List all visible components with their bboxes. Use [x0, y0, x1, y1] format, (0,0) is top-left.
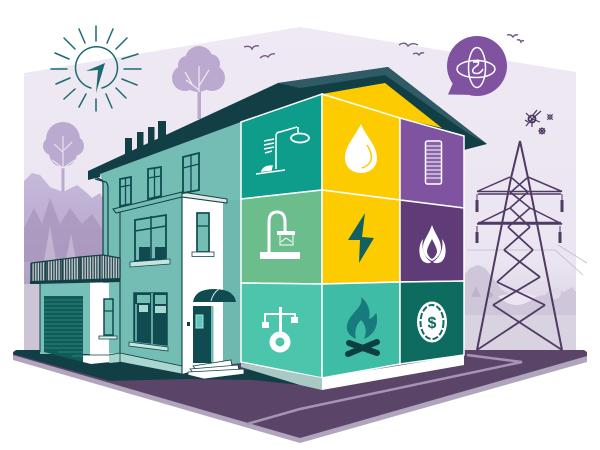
icon: atom speech bubble — [447, 36, 507, 96]
plinth right — [322, 355, 464, 390]
icon: campfire — [347, 297, 377, 354]
icon: gas flame — [419, 225, 446, 263]
icon: sparks — [525, 110, 553, 135]
icon: shower — [256, 127, 309, 174]
distant hills and trees — [465, 265, 576, 352]
roof — [88, 67, 487, 180]
ground surface — [13, 350, 587, 438]
bay window upper — [192, 213, 214, 256]
forest silhouette — [24, 173, 104, 350]
facade plinth — [120, 353, 182, 374]
panel: utility valve — [241, 283, 322, 378]
chimney parapet — [125, 121, 166, 160]
plinth left — [241, 363, 322, 390]
birds — [244, 35, 524, 58]
balcony ledge — [113, 192, 227, 213]
icon: radiator — [426, 141, 442, 184]
white bay — [182, 197, 223, 374]
drain pipe — [95, 177, 108, 258]
garage door — [44, 296, 83, 362]
panel: campfire — [322, 282, 400, 378]
panel: gas — [400, 200, 464, 282]
panel: electricity — [322, 190, 400, 284]
house shadow — [13, 350, 330, 385]
panel: cost — [400, 281, 464, 364]
panel: shower — [241, 94, 322, 199]
icon: tap — [260, 212, 300, 259]
panel: water — [322, 94, 400, 200]
ground floor window — [129, 293, 168, 351]
icon: dollar coin — [417, 302, 447, 342]
main facade — [100, 122, 241, 366]
first floor window — [130, 215, 170, 267]
panel: gable yellow — [322, 83, 442, 128]
tree: left — [43, 122, 84, 192]
tree: top centre — [172, 46, 225, 119]
door canopy — [193, 289, 236, 302]
panel: tap — [241, 190, 322, 284]
sky backdrop — [24, 27, 576, 352]
entrance door — [193, 306, 223, 364]
road marking — [247, 355, 522, 424]
energy panels — [241, 83, 464, 378]
garage side window — [99, 299, 117, 339]
panel: radiator — [400, 118, 464, 208]
garage block — [40, 282, 120, 364]
ground platform edge — [13, 354, 587, 443]
icon: sun with compass needle — [51, 26, 141, 111]
icon: transmission tower — [477, 141, 562, 350]
power lines — [467, 245, 587, 275]
wall lamp — [187, 322, 190, 326]
icon: utility valve — [262, 307, 298, 350]
upper windows — [120, 153, 199, 206]
icon: dollar coin: $ — [428, 315, 437, 332]
entrance steps — [188, 360, 244, 379]
garage base — [83, 353, 120, 364]
icon: lightning bolt — [348, 213, 374, 263]
balcony railing — [30, 255, 120, 284]
house — [30, 67, 487, 390]
icon: water drop — [345, 124, 377, 173]
